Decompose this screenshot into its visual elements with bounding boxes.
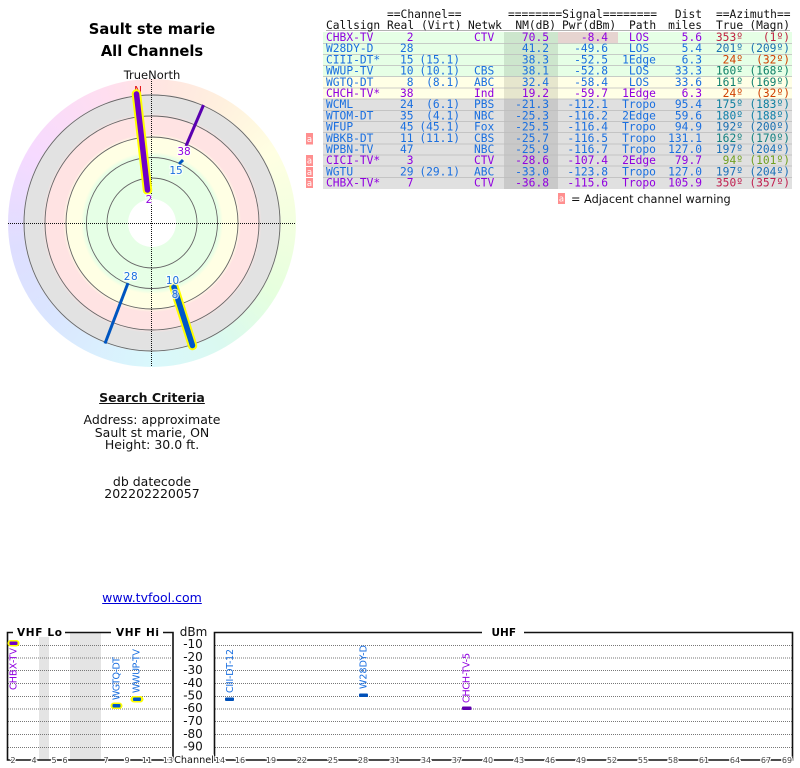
row: WGTU: WGTU	[326, 165, 353, 178]
VHF channel axis: 6	[62, 756, 68, 765]
icons: adjacent channel warnings	[306, 133, 313, 189]
row: CIII-DT*: 1Edge	[622, 53, 656, 66]
row: CHCH-TV*: 19.2	[522, 87, 549, 100]
row: CICI-TV*	[326, 154, 790, 167]
icons: adjacent channel warnings: a	[307, 156, 312, 166]
row: W28DY-D: 201º	[716, 42, 743, 55]
row: CHBX-TV: -8.4	[581, 31, 608, 44]
row: WGTU: -33.0	[515, 165, 549, 178]
UHF channel axis: 19	[266, 756, 276, 765]
row: CIII-DT*: 38.3	[522, 53, 549, 66]
table header: NM(dB)	[515, 19, 556, 32]
icons: adjacent channel warnings: a	[307, 135, 312, 145]
row: WCML: 95.4	[675, 98, 702, 111]
row: CICI-TV*: -28.6	[515, 154, 549, 167]
row: CHCH-TV*: Ind	[474, 87, 494, 100]
row: CICI-TV*: (101º)	[749, 154, 790, 167]
VHF channel axis: 4	[31, 756, 37, 765]
station marker: CIII-DT-12: CIII-DT-12	[225, 649, 236, 693]
search criteria block: Search Criteria	[99, 390, 205, 405]
row: WGTQ-DT: 32.4	[522, 76, 549, 89]
bearing: channel 2	[136, 94, 148, 190]
row: CICI-TV*: -107.4	[567, 154, 608, 167]
dBm axis: -50	[183, 688, 203, 702]
dBm axis: -10	[183, 637, 203, 651]
row: WGTU: (29.1)	[419, 165, 460, 178]
row: WCML: (183º)	[749, 98, 790, 111]
row: WGTU: ABC	[474, 165, 494, 178]
row: CHBX-TV*: Tropo	[622, 177, 656, 190]
row: CHCH-TV*	[326, 87, 790, 100]
row: W28DY-D: -49.6	[574, 42, 608, 55]
row: WPBN-TV	[326, 143, 790, 156]
row: CHBX-TV: 5.6	[682, 31, 702, 44]
dBm axis: -80	[183, 727, 203, 741]
row: CIII-DT*: 24º	[723, 53, 743, 66]
row: W28DY-D	[326, 42, 790, 55]
row: WGTQ-DT	[326, 76, 790, 89]
row: CIII-DT*: CIII-DT*	[326, 53, 380, 66]
row: CHBX-TV*: 350º	[716, 177, 743, 190]
table header: Pwr(dBm)	[562, 19, 616, 32]
crosshair	[8, 79, 296, 367]
north label: N	[134, 85, 142, 97]
row: CICI-TV*: 2Edge	[622, 154, 656, 167]
row: WCML: PBS	[474, 98, 495, 111]
row: CHBX-TV*	[326, 177, 790, 190]
row: CIII-DT*: 15	[400, 53, 414, 66]
row: WGTQ-DT: 33.6	[675, 76, 702, 89]
UHF channel axis: 25	[328, 756, 338, 765]
icons: adjacent channel warnings: a	[307, 179, 312, 189]
row: WFUP: 192º	[716, 121, 743, 134]
table header: ==Azimuth==	[716, 8, 791, 21]
row: CHBX-TV: 2	[407, 31, 414, 44]
database datecode: db datecode	[113, 474, 191, 489]
table header: Real	[387, 19, 414, 32]
table header: ========Signal========	[508, 8, 657, 21]
row: CHBX-TV*: 105.9	[668, 177, 702, 190]
dBm axis: -30	[183, 663, 203, 677]
UHF channel axis: 16	[235, 756, 245, 765]
channel labels: 28	[124, 271, 138, 283]
row: WFUP: (45.1)	[419, 121, 460, 134]
table header: Callsign	[326, 19, 380, 32]
UHF channel axis: 34	[421, 756, 431, 765]
dBm axis: dBm	[180, 625, 207, 639]
row: WGTU	[326, 165, 790, 178]
row: CICI-TV*: CTV	[474, 154, 495, 167]
row: WTOM-DT: (188º)	[749, 109, 790, 122]
row: WTOM-DT	[326, 109, 790, 122]
row: WGTQ-DT: 161º	[716, 76, 743, 89]
row: WFUP: 94.9	[675, 121, 702, 134]
row: WBKB-DT: CBS	[474, 132, 495, 145]
row: WCML: WCML	[326, 98, 353, 111]
row: WCML: (6.1)	[426, 98, 460, 111]
VHF channel axis: 13	[163, 756, 173, 765]
row: WCML: Tropo	[622, 98, 656, 111]
signal bands	[23, 94, 281, 352]
row: CHCH-TV*: 38	[400, 87, 414, 100]
bearing: channel 38	[186, 105, 204, 146]
row: W28DY-D: W28DY-D	[326, 42, 374, 55]
row: WCML: -21.3	[515, 98, 549, 111]
UHF channel axis: 64	[730, 756, 740, 765]
UHF channel axis: 55	[638, 756, 648, 765]
channel labels	[124, 146, 191, 301]
row: WWUP-TV: 160º	[716, 65, 743, 78]
database datecode	[104, 474, 200, 501]
row: CHBX-TV: 70.5	[522, 31, 549, 44]
dBm axis: -60	[183, 701, 203, 715]
bearing: channel 15	[179, 160, 183, 164]
heading: UHF: UHF	[492, 627, 516, 639]
row: WBKB-DT: 11	[400, 132, 414, 145]
row: WGTU: -123.8	[567, 165, 608, 178]
station marker: WWUP-TV: WWUP-TV	[132, 648, 142, 693]
UHF channel axis: 22	[297, 756, 307, 765]
row: CHCH-TV*: 6.3	[682, 87, 702, 100]
row: CICI-TV*: CICI-TV*	[326, 154, 380, 167]
outer azimuth colour ring	[8, 79, 296, 367]
UHF channel axis: 43	[514, 756, 524, 765]
station marker: W28DY-D: W28DY-D	[358, 645, 370, 689]
title: Sault ste marie	[89, 21, 215, 38]
row: WGTQ-DT: (169º)	[749, 76, 790, 89]
row: WWUP-TV: LOS	[629, 65, 649, 78]
row: CIII-DT*: 6.3	[682, 53, 702, 66]
row: WBKB-DT	[326, 132, 790, 145]
UHF channel axis: 49	[576, 756, 586, 765]
row: WBKB-DT: (11.1)	[419, 132, 460, 145]
channel labels: 38	[177, 146, 191, 158]
station table	[306, 8, 792, 206]
row: WFUP: Tropo	[622, 121, 656, 134]
row: WCML: 24	[400, 98, 414, 111]
UHF channel axis: 28	[358, 756, 368, 765]
row: WPBN-TV: -25.9	[515, 143, 549, 156]
row: CHCH-TV*: (32º)	[756, 87, 790, 100]
row: CIII-DT*	[326, 53, 790, 66]
row: WWUP-TV: 33.3	[675, 65, 702, 78]
row: WTOM-DT: 2Edge	[622, 109, 656, 122]
UHF channel axis: 37	[452, 756, 462, 765]
row: CHBX-TV: CTV	[474, 31, 495, 44]
station marker: CHCH-TV-5: CHCH-TV-5	[462, 653, 472, 703]
row: CHBX-TV*: -36.8	[515, 177, 549, 190]
row: WBKB-DT: Tropo	[622, 132, 656, 145]
icons: adjacent channel warnings: a	[307, 168, 312, 178]
table header: Path	[629, 19, 656, 32]
table header	[326, 8, 791, 32]
row: WFUP: WFUP	[326, 121, 353, 134]
row: WBKB-DT: 131.1	[668, 132, 702, 145]
station marker: WGTQ-DT: WGTQ-DT	[112, 657, 122, 700]
row: WFUP: -116.4	[567, 121, 608, 134]
row: W28DY-D: LOS	[629, 42, 649, 55]
channel labels: 15	[169, 165, 183, 177]
true north label: TrueNorth	[123, 68, 180, 82]
row: WPBN-TV: 197º	[716, 143, 743, 156]
row: WGTQ-DT: ABC	[474, 76, 494, 89]
row: WPBN-TV: Tropo	[622, 143, 656, 156]
row: W28DY-D: (209º)	[749, 42, 790, 55]
bearing: channel 28	[105, 283, 128, 344]
row: WBKB-DT: -25.7	[515, 132, 549, 145]
website link: www.tvfool.com	[102, 590, 202, 605]
dBm axis: -20	[183, 650, 203, 664]
table header: True	[716, 19, 743, 32]
row: CIII-DT*: (32º)	[756, 53, 790, 66]
UHF channel axis	[215, 756, 792, 765]
channel axis label: Channel	[174, 755, 214, 766]
row: WTOM-DT: WTOM-DT	[326, 109, 374, 122]
row: WPBN-TV: (204º)	[749, 143, 790, 156]
search criteria block: Height: 30.0 ft.	[105, 437, 199, 452]
row: WTOM-DT: 35	[400, 109, 414, 122]
row: WPBN-TV: NBC	[474, 143, 494, 156]
row: WWUP-TV: -52.8	[574, 65, 608, 78]
row: WWUP-TV	[326, 65, 790, 78]
row: W28DY-D: 5.4	[682, 42, 702, 55]
row: CHCH-TV*: CHCH-TV*	[326, 87, 380, 100]
table header: miles	[668, 19, 702, 32]
row: CHBX-TV*: -115.6	[567, 177, 608, 190]
row: WTOM-DT: -25.3	[515, 109, 549, 122]
UHF channel axis: 40	[483, 756, 493, 765]
unavailable VHF channels	[39, 633, 101, 760]
heading: VHF Hi: VHF Hi	[116, 627, 159, 639]
VHF gridlines	[8, 646, 172, 748]
row: CHBX-TV*: (357º)	[749, 177, 790, 190]
title	[89, 21, 215, 60]
row: WPBN-TV: WPBN-TV	[326, 143, 374, 156]
dBm axis: -90	[183, 740, 203, 754]
row: WGTU: (204º)	[749, 165, 790, 178]
row: W28DY-D: 28	[400, 42, 414, 55]
row: CHBX-TV*: CTV	[474, 177, 495, 190]
row: WGTQ-DT: 8	[407, 76, 414, 89]
table header: Dist	[675, 8, 702, 21]
UHF channel axis: 46	[545, 756, 555, 765]
row: WTOM-DT: -116.2	[567, 109, 608, 122]
row backgrounds	[323, 32, 792, 189]
database datecode: 202202220057	[104, 486, 200, 501]
search criteria block: Sault st marie, ON	[95, 425, 209, 440]
VHF channel axis: 7	[103, 756, 109, 765]
UHF gridlines	[215, 646, 792, 748]
row: CHBX-TV: (1º)	[763, 31, 790, 44]
row: WBKB-DT: WBKB-DT	[326, 132, 374, 145]
row: WFUP: Fox	[474, 121, 495, 134]
UHF channel axis: 58	[668, 756, 678, 765]
table header: ==Channel==	[387, 8, 462, 21]
bearing: channels 10 and 8	[174, 287, 192, 346]
row: WTOM-DT: NBC	[474, 109, 494, 122]
heading: VHF Lo: VHF Lo	[17, 627, 62, 639]
row: W28DY-D: 41.2	[522, 42, 549, 55]
channel labels: 8	[172, 289, 178, 301]
row: WTOM-DT: 59.6	[675, 109, 702, 122]
row: WTOM-DT: (4.1)	[426, 109, 460, 122]
range circles	[24, 95, 280, 351]
VHF channel axis: 9	[124, 756, 130, 765]
row: CHCH-TV*: 1Edge	[622, 87, 656, 100]
radar rings and bearings	[8, 68, 295, 366]
row: WGTU: 127.0	[668, 165, 702, 178]
table header: Netwk	[468, 19, 502, 32]
row: WCML: 175º	[716, 98, 743, 111]
VHF channel axis: 11	[142, 756, 152, 765]
UHF channel axis: 14	[215, 756, 225, 765]
VHF channel axis: 2	[10, 756, 16, 765]
row: WGTU: Tropo	[622, 165, 656, 178]
row: CHBX-TV	[326, 31, 790, 44]
row: WPBN-TV: 47	[400, 143, 414, 156]
row: WGTU: 29	[400, 165, 414, 178]
VHF frame	[8, 632, 173, 760]
row: CHCH-TV*: -59.7	[574, 87, 608, 100]
row: CHBX-TV: LOS	[629, 31, 649, 44]
table header: (Virt)	[421, 19, 462, 32]
row: CICI-TV*: 79.7	[675, 154, 702, 167]
dBm axis	[180, 625, 207, 754]
row: WWUP-TV: (168º)	[749, 65, 790, 78]
UHF channel axis: 52	[607, 756, 617, 765]
row: WGTU: 197º	[716, 165, 743, 178]
station marker: WWUP-TV	[130, 648, 144, 702]
row: WWUP-TV: (10.1)	[419, 65, 460, 78]
row: WFUP: 45	[400, 121, 414, 134]
row: WPBN-TV: 127.0	[668, 143, 702, 156]
station marker: CHBX-TV: CHBX-TV	[8, 648, 20, 690]
row: WTOM-DT: 180º	[716, 109, 743, 122]
row: WGTQ-DT: (8.1)	[426, 76, 460, 89]
VHF channel axis: 5	[51, 756, 57, 765]
row: CHBX-TV: 353º	[716, 31, 743, 44]
title: All Channels	[101, 42, 203, 60]
legend: adjacent channel warning: a	[559, 194, 564, 204]
row: CIII-DT*: -52.5	[574, 53, 608, 66]
row: WWUP-TV: WWUP-TV	[326, 65, 374, 78]
row: WFUP: -25.5	[515, 121, 549, 134]
table header: (Magn)	[749, 19, 790, 32]
row: CICI-TV*: 94º	[723, 154, 743, 167]
search criteria block: Address: approximate	[84, 412, 220, 427]
row: WPBN-TV: -116.7	[567, 143, 608, 156]
row: WGTQ-DT: LOS	[629, 76, 649, 89]
row: WCML	[326, 98, 790, 111]
legend: adjacent channel warning: = Adjacent channel warning	[571, 193, 731, 206]
row: WBKB-DT: (170º)	[749, 132, 790, 145]
row: WGTQ-DT: -58.4	[574, 76, 608, 89]
row: WBKB-DT: -116.5	[567, 132, 608, 145]
row: WBKB-DT: 162º	[716, 132, 743, 145]
row: CHBX-TV: CHBX-TV	[326, 31, 374, 44]
row: WWUP-TV: 38.1	[522, 65, 549, 78]
channel labels: 10	[166, 275, 179, 287]
UHF channel axis: 67	[761, 756, 771, 765]
search criteria block	[84, 390, 220, 452]
channel labels: 2	[146, 194, 152, 206]
panel: polar signal chart	[8, 68, 296, 367]
row: WCML: -112.1	[567, 98, 608, 111]
UHF frame	[214, 632, 792, 760]
UHF channel axis: 69	[782, 756, 792, 765]
row: CHCH-TV*: 24º	[723, 87, 743, 100]
row: CHBX-TV*: 7	[407, 177, 414, 190]
dBm axis: -70	[183, 714, 203, 728]
VHF channel axis	[10, 756, 173, 765]
row: WWUP-TV: 10	[400, 65, 414, 78]
row: WFUP: (200º)	[749, 121, 790, 134]
UHF channel axis: 31	[390, 756, 400, 765]
row: WWUP-TV: CBS	[474, 65, 495, 78]
dBm axis: -40	[183, 676, 203, 690]
row: WGTQ-DT: WGTQ-DT	[326, 76, 374, 89]
row: CIII-DT*: (15.1)	[419, 53, 460, 66]
UHF channel axis: 61	[699, 756, 709, 765]
row: CICI-TV*: 3	[407, 154, 414, 167]
row: CHBX-TV*: CHBX-TV*	[326, 177, 380, 190]
row: WFUP	[326, 121, 790, 134]
